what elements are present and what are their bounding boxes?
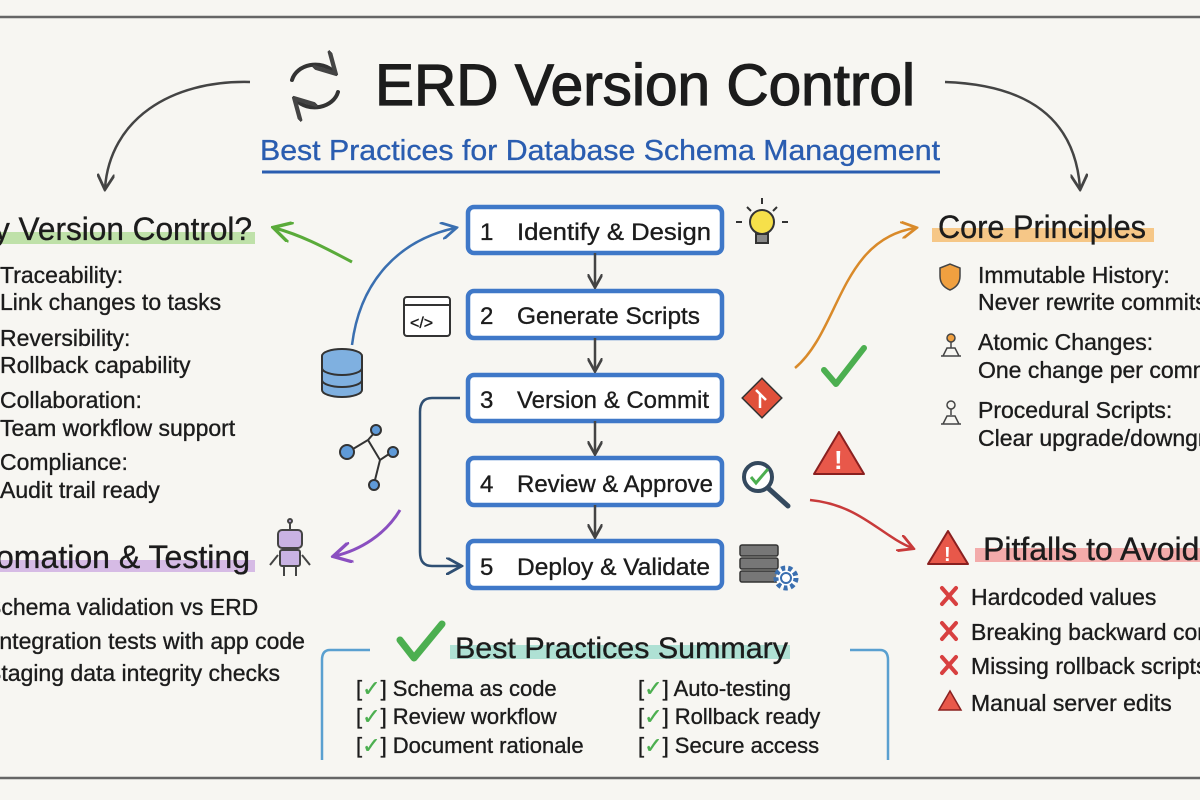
panel: core principles: Core Principles bbox=[938, 209, 1146, 245]
flow: steps: Identify & Design bbox=[517, 219, 711, 246]
subtitle: Best Practices for Database Schema Management bbox=[260, 135, 940, 167]
icon: server gear bbox=[740, 545, 796, 588]
title: ERD Version Control bbox=[375, 53, 915, 118]
icon: magnifier check bbox=[744, 463, 788, 506]
panel: core principles: Procedural Scripts: bbox=[978, 397, 1172, 423]
panel: why version control bbox=[0, 211, 255, 503]
icon: code window bbox=[404, 297, 450, 336]
flow: steps: Deploy & Validate bbox=[517, 554, 710, 581]
arrow: purple bbox=[335, 510, 400, 556]
icon: git bbox=[742, 378, 782, 418]
flow: steps: 5 bbox=[480, 554, 493, 581]
icon: warning bbox=[814, 432, 864, 475]
panel: why version control: Audit trail ready bbox=[0, 477, 160, 503]
icon: bulb bbox=[736, 198, 788, 243]
flow: steps bbox=[468, 207, 722, 588]
panel: pitfalls: Pitfalls to Avoid bbox=[983, 531, 1199, 567]
panel: pitfalls: Manual server edits bbox=[971, 690, 1172, 716]
icon: warning: ! bbox=[834, 445, 843, 475]
panel: why version control: Link changes to tasks bbox=[0, 289, 221, 315]
flow: steps: 4 bbox=[480, 471, 493, 498]
icon: code window: </> bbox=[410, 315, 433, 332]
flow: steps: 3 bbox=[480, 387, 493, 414]
arrow: blue curve to step 1 bbox=[352, 228, 455, 345]
panel: core principles: Atomic Changes: bbox=[978, 329, 1153, 355]
panel: why version control: Team workflow support bbox=[0, 415, 236, 441]
arrow: bracket step3 to step5 bbox=[420, 398, 460, 566]
panel: best practices summary: [✓] Rollback ready bbox=[638, 704, 820, 729]
panel: automation & testing: Integration tests with app code bbox=[0, 628, 305, 654]
panel: why version control: Traceability: bbox=[0, 262, 123, 288]
flow: steps: 2 bbox=[480, 303, 493, 330]
icon: robot bbox=[270, 519, 310, 576]
panel: best practices summary: Best Practices Summary bbox=[455, 632, 788, 665]
panel: why version control: Collaboration: bbox=[0, 387, 142, 413]
panel: why version control: y Version Control? bbox=[0, 211, 252, 247]
panel: pitfalls: Hardcoded values bbox=[971, 584, 1156, 610]
icon: network bbox=[340, 425, 398, 490]
flow: steps: Generate Scripts bbox=[517, 303, 700, 330]
panel: why version control: Reversibility: bbox=[0, 325, 130, 351]
panel: automation & testing: omation & Testing bbox=[0, 539, 250, 575]
panel: core principles: Immutable History: bbox=[978, 262, 1170, 288]
flow: steps: Review & Approve bbox=[517, 471, 713, 498]
panel: core principles bbox=[932, 209, 1200, 451]
panel: why version control: Compliance: bbox=[0, 449, 128, 475]
icon: database bbox=[322, 349, 362, 397]
arrow: top-right curve bbox=[945, 82, 1080, 188]
arrow: red bbox=[810, 500, 912, 548]
icon: refresh bbox=[292, 65, 338, 107]
panel: core principles: Never rewrite commits bbox=[978, 289, 1200, 315]
panel: why version control: Rollback capability bbox=[0, 352, 191, 378]
panel: automation & testing bbox=[0, 539, 305, 686]
icon: green check bbox=[824, 348, 864, 384]
panel: best practices summary: [✓] Schema as code bbox=[356, 676, 557, 701]
arrow: top-left curve bbox=[105, 82, 250, 188]
panel: pitfalls bbox=[928, 531, 1200, 716]
panel: pitfalls: ! bbox=[944, 544, 951, 566]
flow: steps: 1 bbox=[480, 219, 493, 246]
panel: best practices summary: [✓] Secure access bbox=[638, 733, 819, 758]
panel: best practices summary: [✓] Review workflow bbox=[356, 704, 557, 729]
panel: best practices summary: [✓] Document rationale bbox=[356, 733, 584, 758]
arrow: orange bbox=[795, 228, 915, 368]
arrow: green to why bbox=[275, 228, 352, 262]
panel: best practices summary: [✓] Auto-testing bbox=[638, 676, 791, 701]
panel: best practices summary bbox=[322, 624, 888, 760]
flow: steps: Version & Commit bbox=[517, 387, 709, 414]
